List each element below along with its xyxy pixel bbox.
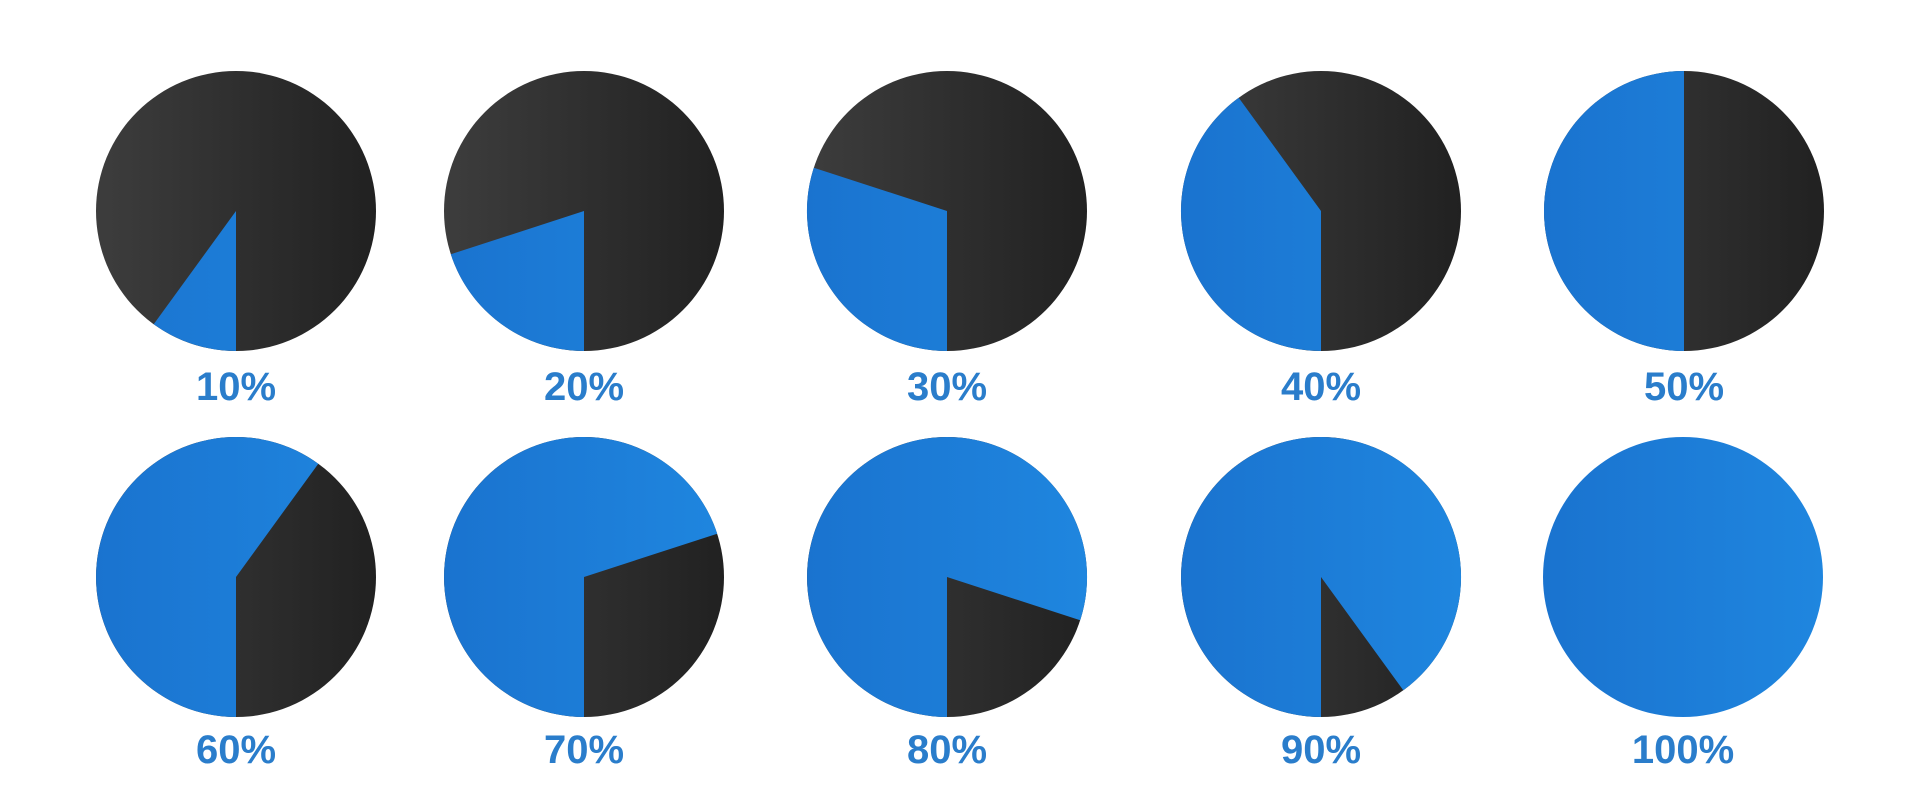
pie 100%: 100% — [1632, 728, 1734, 772]
pie 20%: 20% — [544, 365, 624, 409]
pie 80% — [807, 437, 1087, 772]
pie 90% — [1181, 437, 1461, 772]
pie 30%: 30% — [907, 365, 987, 409]
pie 40%: 40% — [1281, 365, 1361, 409]
pie 10% — [96, 71, 376, 409]
pie 20% — [444, 71, 724, 409]
pie 10%: 10% — [196, 365, 276, 409]
pie 70%: 70% — [544, 728, 624, 772]
pie 60% — [96, 437, 376, 772]
pie 30% — [807, 71, 1087, 409]
pie 100% — [1543, 437, 1823, 772]
pie 50% — [1544, 71, 1824, 409]
pie 60%: 60% — [196, 728, 276, 772]
pie 40% — [1181, 71, 1461, 409]
pie 80%: 80% — [907, 728, 987, 772]
pie 90%: 90% — [1281, 728, 1361, 772]
pie 50%: 50% — [1644, 365, 1724, 409]
pie 70% — [444, 437, 724, 772]
